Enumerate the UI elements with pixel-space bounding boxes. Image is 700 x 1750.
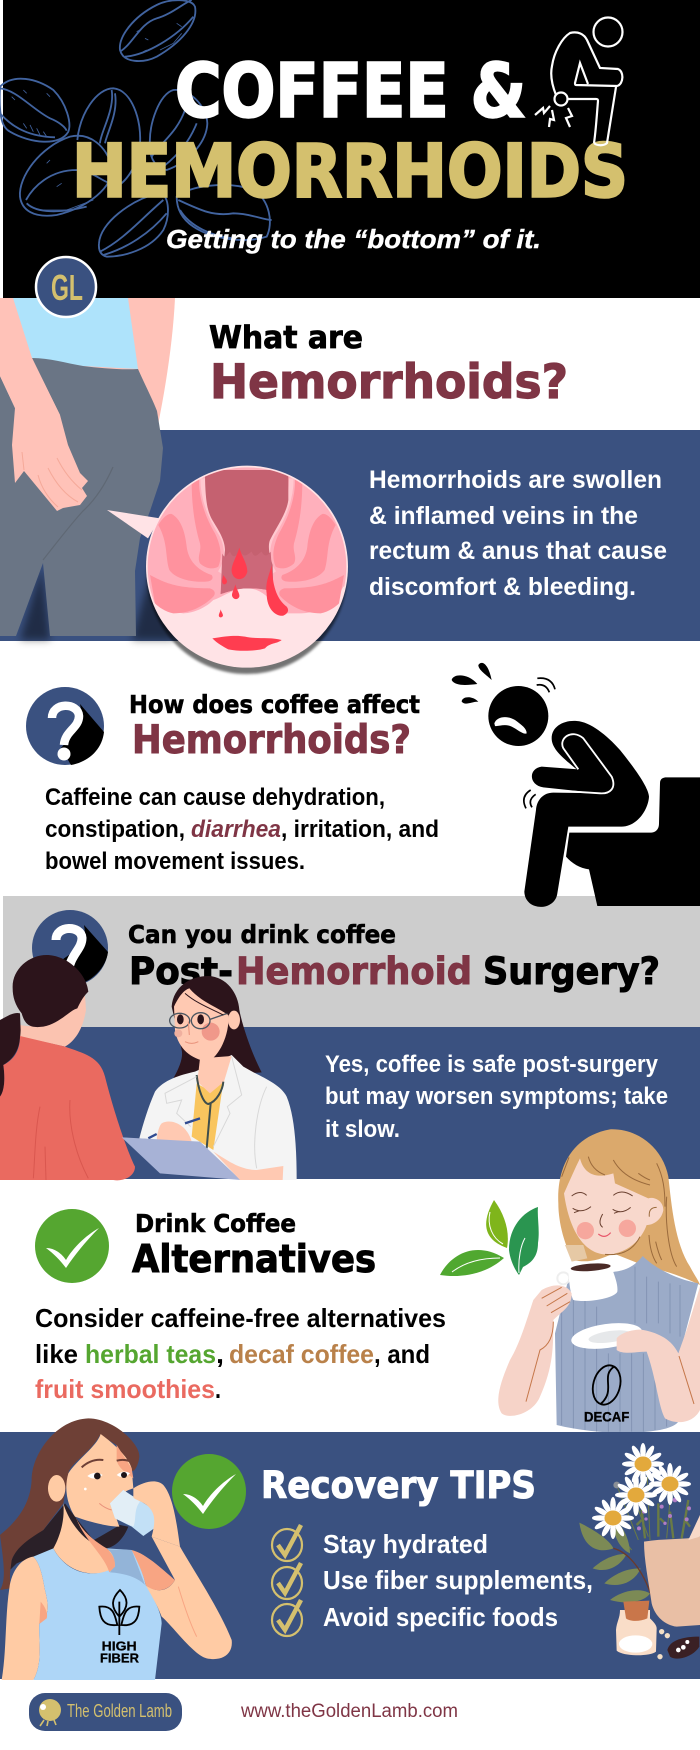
text: decaf: DECAF [584,1409,630,1425]
badge: GL logo [36,257,96,317]
text: caffeine effects: constipation, [45,816,185,843]
list: recovery tips: Stay hydrated [323,1529,488,1559]
text: high fiber: HIGH [102,1639,137,1654]
text: caffeine-free alternatives [35,1303,446,1404]
list: recovery tips [272,1525,593,1636]
icon: question badge [32,910,108,986]
text: caffeine-free alternatives: like [35,1339,78,1369]
title: hemorrhoids: HEMORRHOIDS [72,130,628,214]
text: brand name: The Golden Lamb [67,1701,172,1721]
heading: hemorrhoids: Hemorrhoids? [132,718,411,763]
heading: post-hemorrhoid surgery: Hemorrhoid [236,950,472,993]
text: post-surgery answer: it slow. [325,1116,400,1143]
illustration: rectum cross-section callout [107,466,348,676]
icon: question badge [26,687,104,765]
icon: decaf bean [589,1362,625,1408]
icon: coffee beans [0,0,272,257]
text: hemorrhoids definition: rectum & anus that cause [369,537,667,565]
badge: GL logo: GL [51,267,83,308]
heading: alternatives: Alternatives [132,1237,376,1281]
illustration: woman drinking water [0,1418,232,1680]
text: caffeine-free alternatives: herbal teas [85,1339,216,1369]
text: hemorrhoids definition [369,466,667,601]
text: caffeine effects: , irritation, and [281,816,439,843]
text: caffeine-free alternatives: decaf coffee [229,1339,374,1369]
panel: what are hemorrhoids band [0,430,700,641]
text: caffeine-free alternatives: , and [374,1339,430,1369]
footer logo: the golden lamb [29,1693,182,1731]
heading: recovery tips: Recovery TIPS [261,1464,536,1507]
illustration: woman lower body [0,298,175,642]
text: caffeine-free alternatives: . [215,1374,221,1404]
text: caffeine effects: Caffeine can cause dehydration, [45,784,385,811]
panel: post-surgery grey band [3,896,700,1027]
icon: seated person in pain [535,18,622,145]
heading: how does coffee affect: How does coffee affect [129,690,420,719]
illustration: flowers, vase and jar [579,1443,700,1659]
heading: drink coffee: Drink Coffee [135,1209,296,1238]
text: post-surgery answer: Yes, coffee is safe post-surgery [325,1051,659,1078]
text: hemorrhoids definition: discomfort & bleeding. [369,573,636,601]
panel: post-surgery blue band [0,1027,700,1179]
tagline: Getting to the “bottom” of it. [166,224,541,254]
illustration: doctor with clipboard [122,976,297,1180]
icon: person in pain on toilet [452,663,700,907]
panel: recovery tips band [0,1432,700,1679]
text: caffeine effects: diarrhea [191,816,281,843]
list: recovery tips: Avoid specific foods [323,1602,558,1632]
title: coffee and: COFFEE & [175,48,526,134]
text: caffeine effects [45,784,439,875]
icon: golden lamb [39,1699,61,1726]
illustration: patient from behind [0,955,135,1180]
icon: tea leaves [440,1200,539,1276]
text: post-surgery answer [325,1051,668,1143]
text: hemorrhoids definition: Hemorrhoids are swollen [369,466,662,494]
text: post-surgery answer: but may worsen symptoms; take [325,1083,668,1110]
heading: post-hemorrhoid surgery: Post- [129,950,233,993]
heading: post-hemorrhoid surgery [129,950,660,993]
heading: can you drink coffee: Can you drink coffee [128,920,396,949]
footer website: www.theGoldenLamb.com [240,1701,458,1722]
illustration: woman with decaf coffee [498,1129,700,1433]
icon: green check badge [172,1454,246,1529]
list: recovery tips: Use fiber supplements, [323,1565,593,1595]
header: black banner [0,0,700,298]
heading: post-hemorrhoid surgery: Surgery? [483,950,660,993]
text: caffeine-free alternatives: fruit smoothies [35,1374,215,1404]
text: caffeine-free alternatives: , [216,1339,224,1369]
text: high fiber [100,1639,139,1666]
text: caffeine effects: bowel movement issues. [45,848,305,875]
icon: high fiber leaves [99,1590,139,1635]
text: caffeine-free alternatives: Consider caffeine-free alternatives [35,1303,446,1333]
text: hemorrhoids definition: & inflamed veins in the [369,502,638,530]
heading: what are: What are [209,320,363,356]
icon: green check badge [35,1209,109,1283]
text: high fiber: FIBER [100,1651,139,1666]
heading: hemorrhoids: Hemorrhoids? [210,355,568,410]
